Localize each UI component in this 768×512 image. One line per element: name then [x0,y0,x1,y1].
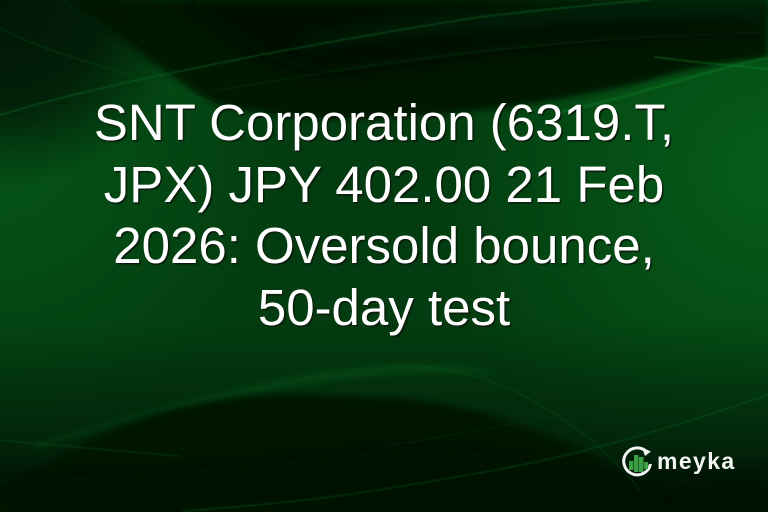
bottom left light band [30,365,500,448]
title: 2026: Oversold bounce, [113,217,655,274]
icon: ring with bars [622,446,652,476]
logo: meyka [622,446,736,476]
top right light band [300,0,768,46]
title: JPX) JPY 402.00 21 Feb [104,156,664,212]
top dark swoosh [70,0,768,119]
bottom dark swoosh [0,395,680,512]
logo wordmark: meyka [657,448,736,474]
title: SNT Corporation (6319.T, [94,94,674,151]
title [94,94,674,337]
title: 50-day test [258,278,510,336]
